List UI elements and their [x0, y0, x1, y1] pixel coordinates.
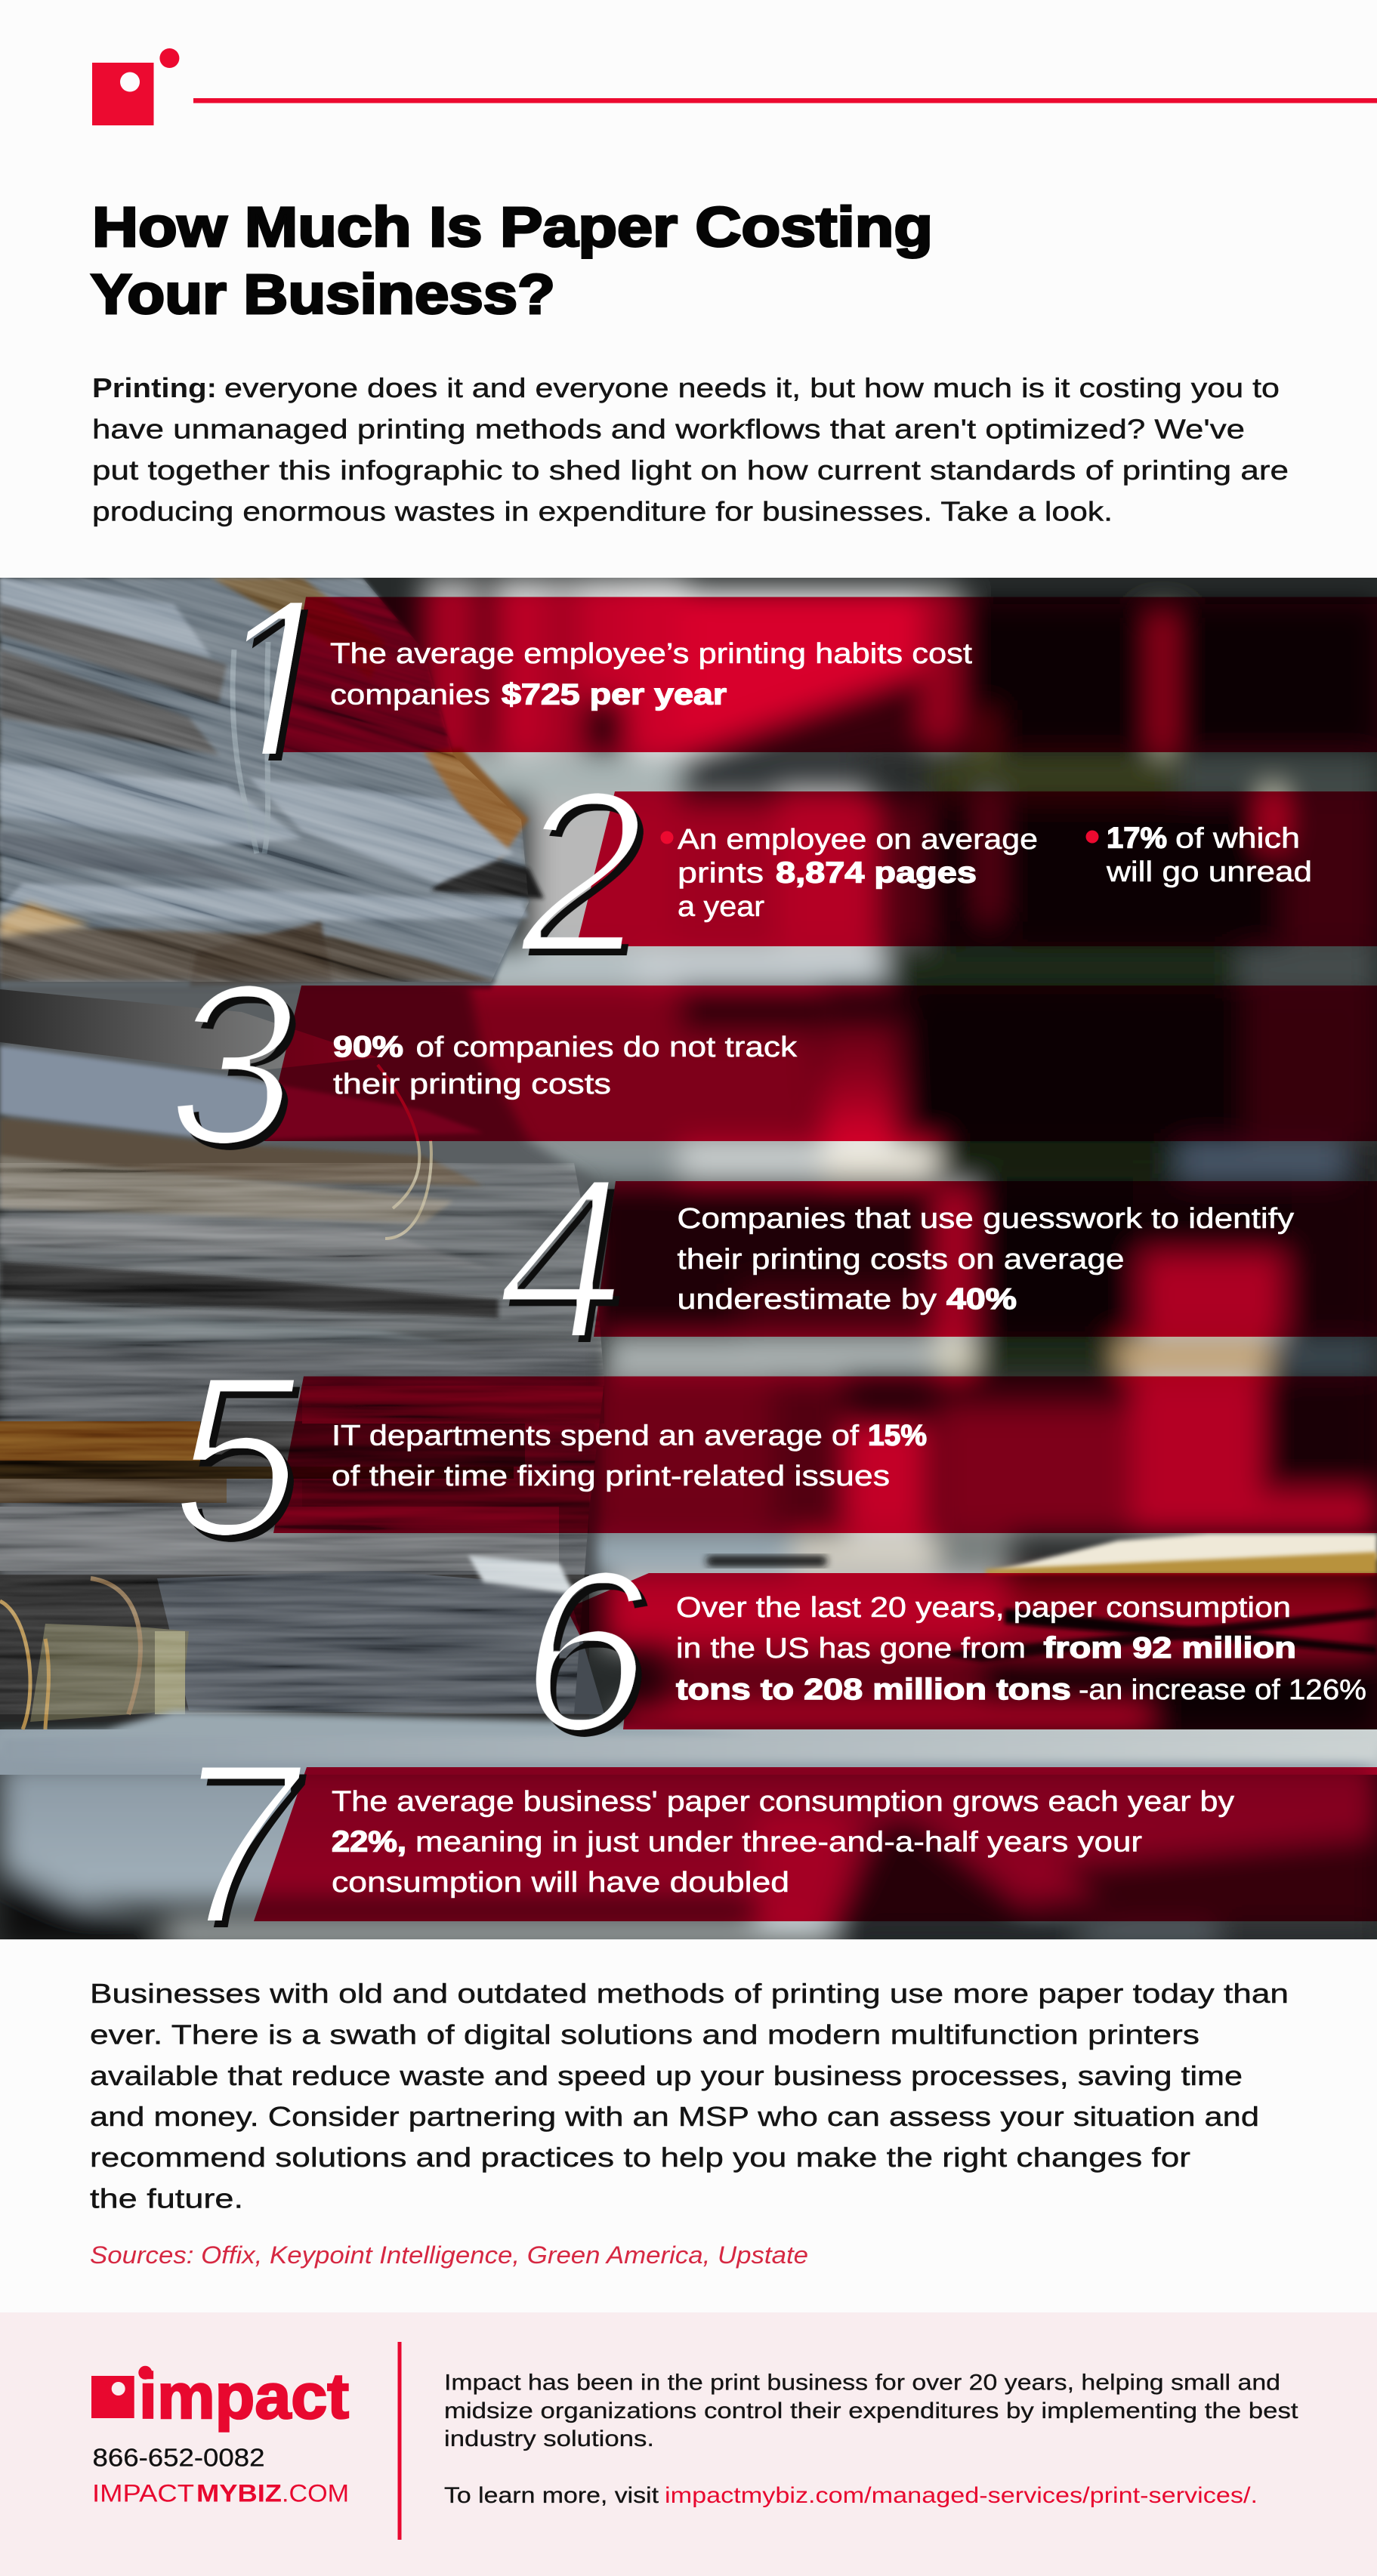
paper streak texture, upper stack [0, 328, 739, 1137]
band: stat 6 [567, 1573, 1377, 1729]
stat 2 [576, 791, 1377, 946]
text: stat 2 second point: of which [1175, 823, 1300, 855]
stat 3 [264, 986, 1377, 1141]
text: stat 7: The average business' paper consumption grows each year by [332, 1786, 1234, 1818]
icon: logo mark [92, 48, 179, 125]
text: stat 7 [332, 1786, 1234, 1899]
text: stat 6: tons to 208 million tons [676, 1674, 1071, 1706]
text: stat 2 first point: prints [678, 858, 764, 890]
text: stat 4: their printing costs on average [677, 1244, 1124, 1276]
text: stat 1 [330, 638, 972, 711]
big numerals 1 to 7: 4 [480, 1130, 650, 1388]
website: IMPACT [92, 2480, 194, 2507]
paper streak texture, lower stack [0, 1163, 665, 1722]
big numerals 1 to 7 [152, 544, 673, 1973]
footer text: Impact has been in the print business for over 20 years, helping small and [444, 2370, 1280, 2395]
band: stat 5 [273, 1376, 1377, 1533]
closing paragraph: available that reduce waste and speed up your business processes, saving time [90, 2060, 1243, 2091]
title: How Much Is Paper Costing [92, 196, 933, 258]
footer text: impactmybiz.com/managed-services/print-services/. [665, 2483, 1258, 2508]
header: logo and rule [92, 48, 1377, 125]
sources: Sources: Offix, Keypoint Intelligence, Green America, Upstate [90, 2241, 808, 2269]
big numerals 1 to 7: 6 [504, 1522, 673, 1781]
text: stat 7: 22%, [332, 1826, 406, 1858]
band: stat 7 [254, 1767, 1377, 1921]
text: stat 2 first point: An employee on average [678, 824, 1038, 856]
text: stat 4: 40% [946, 1283, 1017, 1316]
text: stat 4: Companies that use guesswork to identify [677, 1203, 1294, 1235]
footer text: To learn more, visit [444, 2483, 659, 2508]
text: stat 6: in the US has gone from [676, 1633, 1026, 1664]
stat 4 [594, 1181, 1377, 1337]
text: stat 2 second point [1086, 822, 1312, 888]
footer panel [0, 2312, 1377, 2576]
paper stack lower [0, 1340, 1377, 1760]
text: stat 7: consumption will have doubled [332, 1867, 789, 1899]
intro paragraph [92, 372, 1289, 527]
intro paragraph: have unmanaged printing methods and workflows that aren't optimized? We've [92, 414, 1245, 444]
stat 7 [254, 1767, 1377, 1921]
text: stat 2 first point: a year [678, 891, 764, 923]
text: stat 1: The average employee’s printing habits cost [330, 638, 972, 670]
footer text [444, 2370, 1298, 2508]
text: stat 2 first point: 8,874 pages [776, 856, 977, 890]
footer text: midsize organizations control their expenditures by implementing the best [444, 2399, 1298, 2423]
website: MYBIZ [196, 2480, 282, 2507]
website: .COM [282, 2480, 349, 2507]
big numerals 1 to 7: 7 [155, 1715, 324, 1973]
phone number: 866-652-0082 [92, 2444, 264, 2472]
title: Your Business? [91, 263, 555, 325]
website [92, 2480, 349, 2507]
big numerals 1 to 7: 1 [187, 544, 366, 833]
band: stat 1 [277, 597, 1377, 752]
big numerals 1 to 7: 3 [152, 936, 321, 1194]
closing paragraph: and money. Consider partnering with an MSP who can assess your situation and [90, 2101, 1259, 2132]
text: stat 5: 15% [868, 1420, 927, 1452]
desk foreground paper [0, 1729, 1377, 1775]
intro paragraph: producing enormous wastes in expenditure for businesses. Take a look. [92, 495, 1113, 527]
footer logo: impact [139, 2361, 349, 2432]
intro paragraph: everyone does it and everyone needs it, but how much is it costing you to [224, 372, 1280, 403]
intro paragraph: Printing: [92, 372, 217, 403]
photo: stacks of paper on a desk with a blurred red office behind [0, 578, 1377, 1939]
text: stat 2 second point: 17% [1107, 822, 1167, 855]
big numerals 1 to 7: 2 [499, 743, 668, 1001]
band: stat 2 [576, 791, 1377, 946]
text: stat 3: 90% [333, 1031, 403, 1063]
title [91, 196, 933, 325]
text: stat 6: -an increase of 126% [1079, 1674, 1366, 1706]
text: stat 6: from 92 million [1044, 1632, 1296, 1664]
text: stat 1: companies [330, 680, 490, 711]
closing paragraph: the future. [90, 2183, 243, 2214]
intro paragraph: put together this infographic to shed light on how current standards of printing are [92, 455, 1289, 486]
text: stat 5 [332, 1420, 927, 1492]
book on desk [706, 1534, 1377, 1661]
closing paragraph: Businesses with old and outdated methods of printing use more paper today than [90, 1978, 1289, 2009]
text: stat 1: $725 per year [502, 678, 727, 711]
stat 6 [567, 1573, 1377, 1729]
blurred office background [423, 578, 1377, 1731]
footer text: industry solutions. [444, 2426, 654, 2451]
band: stat 4 [594, 1181, 1377, 1337]
text: stat 2 first point [660, 824, 1038, 923]
closing paragraph: ever. There is a swath of digital solutions and modern multifunction printers [90, 2019, 1199, 2050]
text: stat 6: Over the last 20 years, paper consumption [676, 1592, 1291, 1624]
text: stat 5: IT departments spend an average of [332, 1420, 859, 1452]
text: stat 4: underestimate by [677, 1284, 937, 1316]
big numerals 1 to 7: 5 [156, 1328, 325, 1586]
text: stat 4 [677, 1203, 1294, 1316]
text: stat 7: meaning in just under three-and-a-half years your [415, 1826, 1142, 1858]
paper stack upper [0, 578, 544, 989]
text: stat 6 [676, 1592, 1366, 1706]
band: stat 3 [264, 986, 1377, 1141]
paper stack middle [0, 982, 604, 1374]
stat 1 [277, 597, 1377, 752]
text: stat 3 [333, 1031, 798, 1100]
text: stat 3: of companies do not track [415, 1032, 798, 1063]
text: stat 3: their printing costs [333, 1069, 611, 1100]
closing paragraph: recommend solutions and practices to help you make the right changes for [90, 2142, 1190, 2173]
closing paragraph [90, 1978, 1289, 2214]
stat 5 [273, 1376, 1377, 1533]
text: stat 2 second point: will go unread [1106, 856, 1312, 888]
text: stat 5: of their time fixing print-related issues [332, 1461, 890, 1492]
